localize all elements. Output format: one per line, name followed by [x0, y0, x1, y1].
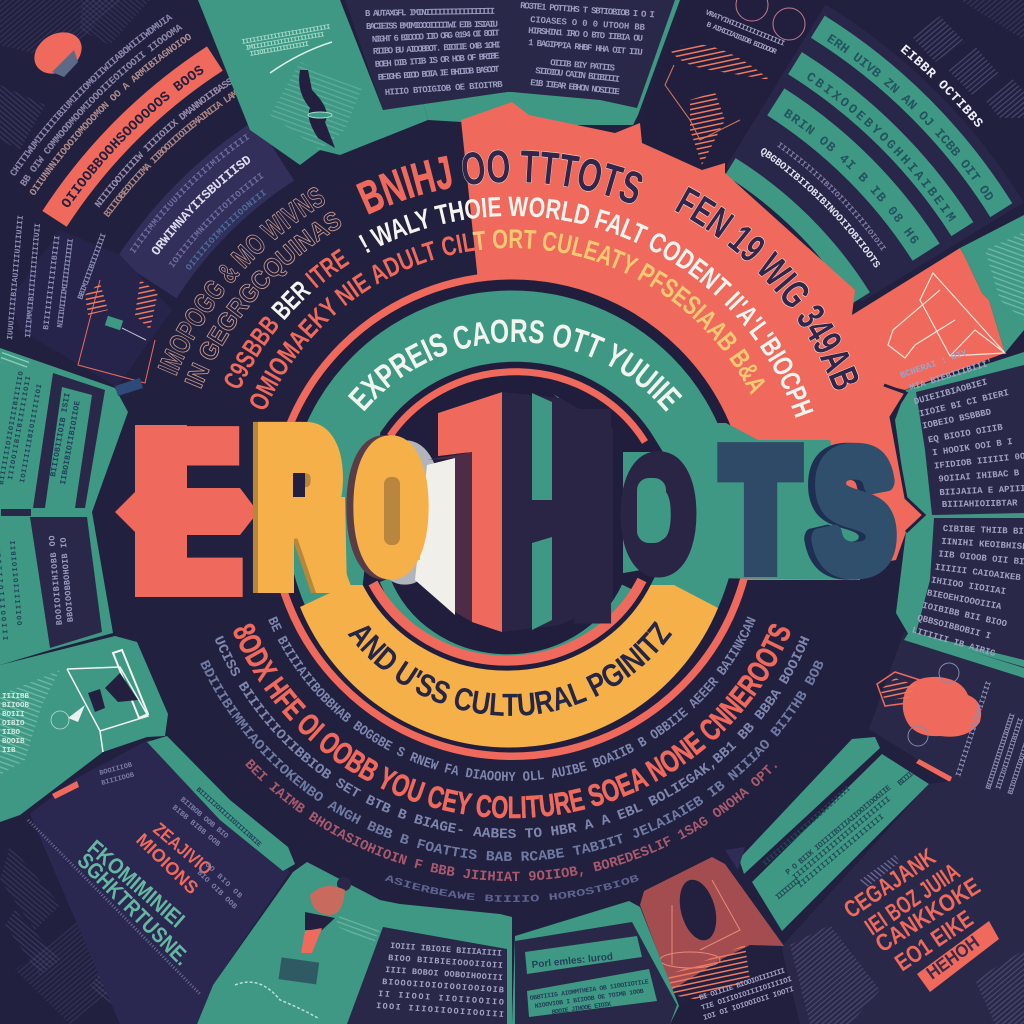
teal headline: SGHKTRTUSNE.	[72, 848, 195, 970]
slate row: IOIIIIIMNIIIIIOIIOIIIII	[168, 172, 264, 268]
text rows: E1B IIEAR EBHON NOSIIIE	[530, 78, 621, 97]
slate row: IIIIIMMIIIUUIIIIIIIIMIIIIIII	[130, 134, 250, 254]
text rows: HIIIO BTOIGIOB OE BIOITRB	[385, 80, 504, 98]
headline rows	[839, 843, 985, 977]
stripe 3	[776, 102, 926, 252]
small rows: IIIIIIIIIIIIIMMIIIIII	[955, 680, 994, 778]
lower teal frame	[730, 167, 861, 298]
panel: bottom text block under maroon: BI OIIIIE BIOOIOIIIIIII	[698, 967, 787, 1003]
hatch	[860, 855, 900, 888]
E arrow tips	[115, 492, 135, 532]
upper text rows: DUIEIIBIAOBIEI	[913, 377, 988, 407]
O fill behind counter	[365, 465, 420, 560]
text rows left column	[6, 215, 109, 340]
face outline	[665, 65, 740, 140]
panel: lower right coral headline	[782, 781, 1024, 1024]
lower panel grid rows	[47, 535, 76, 626]
stripe 1	[818, 27, 1001, 210]
text rows: BACIEISS BMIMIOOOIIIIIWI EIB ISIAIU	[366, 20, 498, 32]
icon: bottle hatch outline	[270, 62, 362, 150]
dark mini text	[279, 957, 319, 984]
tab 2 text: OBBTIIIG AIOMMTHEIA OB 1IOOIIOTILE	[529, 978, 649, 1002]
tab 2 text	[529, 978, 649, 1016]
lower text rows: QBBSOIBBOBII I	[916, 613, 992, 642]
upper dark frame	[33, 373, 105, 508]
line drawing	[235, 982, 318, 1018]
panel: left teal text panels	[0, 348, 143, 665]
panel: right lower brain art	[869, 632, 1024, 810]
rows above band: CHITIWUMIIIIIIBIUMIIIOMOIIWIIABOHIIIWDMUIA	[10, 14, 173, 176]
text rows: BEIGHS BIOD BOIA IE BHIIOB BASOOT	[378, 64, 501, 83]
white grid text: IIIIBB	[2, 693, 30, 701]
icon: coral cap	[27, 24, 89, 82]
panel: bottom text block under maroon: IOI OI IOIOOIOII IOOTI	[702, 986, 795, 1023]
teal headline: FKOMIMINIEI	[83, 835, 190, 933]
text rows: SIIOIOU CAIIN BIIBIIII	[535, 66, 620, 85]
white arc line	[270, 42, 332, 73]
text: world arc: ! WALY THOIE WORLD FALT CODENT II'A'L'BIOCPH	[358, 196, 814, 469]
headline rows: EO1 EIKE	[890, 905, 978, 977]
panel: right upper and lower text panels	[884, 348, 1024, 672]
text rows left column: IIIIMMIIBIIIIIIIIIIIIIUII	[24, 223, 43, 338]
dark text rows: IIII BOBOI OOBOIHOOIII	[385, 965, 503, 983]
lower text rows	[905, 524, 1024, 672]
text rows: OIIIB BIY PATIIS	[550, 58, 616, 74]
left rows: IOIIIIIIIBIOIIIIIIOI	[19, 384, 44, 484]
stripe text: BRIN OB 4I B IB 08 H6	[784, 108, 919, 244]
text rows left column: NIIIUIIIIMIIIIIIIIIIII	[56, 238, 76, 328]
lower text rows: IOIBIBB BII BIOO	[921, 601, 1008, 630]
dark text rows: IOIII IBIOIE BIIIAIIII	[390, 941, 502, 959]
text rows in panel: IIIOIIIIIIIIIIIIII	[249, 41, 310, 59]
letter O side: O	[349, 412, 419, 602]
panel: bottom teal runner	[197, 862, 512, 1024]
globe icons	[736, 0, 768, 21]
panel: teal hatch strip top-right edge	[960, 215, 1024, 353]
white grid text: OIBIO	[2, 720, 25, 728]
slate grid text: BIBB BIBB OOB	[170, 804, 222, 849]
letter S: S	[815, 420, 894, 604]
coral upper arc	[390, 372, 645, 442]
panel: bottom text block under maroon: TIE OIIIOIOIIIIOIIIIOI	[700, 976, 793, 1013]
text rows: CIOASES O 0 0 UTOOH BB	[530, 15, 646, 33]
panel: bottom text block under maroon	[680, 950, 800, 1024]
strip text: BIIIIIIOIIIIIOIIIIIBIIE	[194, 786, 263, 849]
text rows	[365, 1, 655, 98]
E stem	[135, 425, 187, 597]
text: EXPRESS arc: EXPREIS CAORS OTT YUUIIE	[348, 319, 682, 412]
letter E	[115, 384, 258, 638]
text: C988 arc: C9SBBB BER ITRE	[224, 248, 350, 388]
letter H: H	[498, 362, 615, 672]
teal sliver	[553, 394, 613, 438]
coral headline: MIOIONS	[132, 829, 202, 898]
coral tag	[52, 781, 79, 799]
text rows: RO3TE1 POTTIHS T SBTIOBIOB I O I	[520, 1, 655, 20]
dark tab	[725, 847, 745, 870]
dark text rows: II IIOOI IIOIIOOIIO	[378, 989, 504, 1008]
card text rows: P O BIIK IOIIIIBIIIAIIOOIIOOOIIE	[784, 784, 893, 877]
icon: coral brain	[903, 677, 981, 737]
coral band	[54, 58, 215, 219]
text rows left column: IUUUIIIIIBIIAUIIIIUIIIUIII	[6, 215, 26, 340]
coral headline: ZEAJIVIO	[149, 819, 216, 879]
card text rows: IIIIIIIIIIIIIIIIIIIIIIIIII	[791, 795, 893, 882]
H teal stripes	[532, 393, 552, 500]
dark separator	[1, 509, 31, 516]
text: slate bottom arc inner: BE BIIIIAIIBOBBHAB BOGGBE S RNEW FA DIAOOHY OLL AUIBE BOAIIB B OBBIIE AEEER BAIINKCAN	[268, 616, 756, 781]
upper text rows: IOBEIO BSBBBD	[921, 407, 993, 432]
inner rows: IIBOIBIOIIBIOIIOE	[59, 400, 83, 486]
letter O: O	[356, 412, 426, 602]
tab 2 text: BOOIE JIHOOE EIOIK	[551, 1001, 612, 1016]
coral lower arc	[373, 580, 642, 661]
left rows: OOIIIIIIOIIOIBII	[10, 540, 25, 625]
band label: OIIOOBBOOHSOOOOOOS BOOS	[62, 66, 204, 208]
panel: lower left dark card	[28, 736, 295, 1024]
text rows: HIRSHIN1 IRO O BTO IIBIA OU	[528, 26, 643, 44]
upper text rows: EQ BIOIO OIIIB	[927, 422, 1004, 446]
slate grid text: OO BIO OB	[203, 861, 243, 901]
teal top strip	[904, 632, 1024, 678]
text rows in panel	[241, 23, 331, 59]
text rows: B AUTAXGFL IMINIIIIIIIIIIIIIIIII	[365, 7, 495, 19]
dark notch line	[884, 385, 924, 532]
backing panel	[776, 85, 943, 252]
panel: top teal bottle panel	[198, 0, 428, 165]
letter R: R	[258, 391, 342, 623]
text: coral bottom arc: 8ODX HFE OI OOBB YOU CEY COLITURE SOEA NONE CNNEROOTS	[234, 624, 790, 818]
headline rows: IEI BOZ JUIIA	[860, 858, 965, 941]
icon: projector line art on coral	[888, 273, 1005, 358]
lower panel	[916, 518, 1024, 660]
white grid text: BOIII	[2, 711, 25, 719]
text: outlined arc upper: IMOPOGG & MO WIVNS	[157, 187, 325, 376]
maroon block	[428, 452, 472, 622]
card text rows: IIIIIIIIIIIIIIIIIIIIIIIII	[762, 785, 852, 868]
teal stripes	[335, 915, 380, 945]
row: OIIUNNNIIOOOIOMOOOMON OO A ARMIBIAGNOIOO	[30, 34, 191, 195]
dark text rows: BIOOOIIOIOIOOIOOIOIB	[382, 977, 504, 996]
lower panel grid rows: BOOIOIBIHIOBB OO	[47, 535, 65, 626]
white grid text: BOOIB	[2, 738, 25, 746]
headline rows: CEGAJANK	[839, 843, 941, 924]
inner rows: BIIIOBIIIOIB ISII	[49, 392, 73, 478]
slate row: OIIIIIOIMIIIIOONIII	[186, 189, 266, 270]
coral ring left arcs	[272, 276, 752, 756]
R stem and leg	[258, 425, 347, 593]
slate grid text: BIO OIB OOB	[195, 869, 238, 912]
slate tab	[115, 378, 143, 396]
upper text rows: 9OIIAI IHIBAC B	[938, 468, 1020, 485]
lower dark panel	[30, 517, 102, 648]
letter O dark: O	[623, 432, 694, 599]
slate row: IIIIIIIIIIIIBIIOIIIIIIIIIOIOII	[777, 142, 886, 251]
panel: bottom centre tabs	[512, 901, 679, 1024]
upper text rows: BCHERAI : OIY	[899, 348, 969, 381]
text rows in panel: IMIIIIIIIIIIIIIIIIIIIII	[245, 31, 325, 53]
icon: dark projector	[105, 673, 138, 702]
text rows: BOEH DIB ITIB IS OR HOB OF BRIBE	[375, 51, 500, 70]
teal backing behind T and S	[700, 423, 860, 580]
white grid text	[2, 693, 30, 755]
numeral 1 block	[438, 392, 502, 632]
panel: line art left	[10, 230, 172, 387]
top hatch	[0, 352, 30, 370]
text rows: RIIBO BU AIOOBBOT. BIOIIE O4B 1OHI	[373, 40, 501, 57]
panel: coral sector	[461, 102, 1005, 580]
row: BIIIOBEOIIIIMA IIBOOIIIOIIEMAINIIA LAME	[103, 90, 236, 218]
title letters T and S	[724, 419, 894, 604]
row: BB OIW COMMOODMOOMIOOOIIEOIIOOII IIOOOMA	[20, 24, 183, 186]
R side stem	[253, 425, 259, 593]
lower text rows: IHIIOO IIOIIAI	[930, 575, 1007, 597]
white grid text: BIIOOB	[2, 702, 30, 710]
card text rows: IIIIIIII	[774, 876, 803, 902]
R counter front	[293, 473, 305, 497]
icon: bottle	[299, 70, 335, 148]
upper text rows: MIA BIEBIIIBIII'	[909, 358, 994, 393]
coral strip	[916, 759, 952, 782]
white label: ORWIMNAYIISBUIIISD	[152, 156, 250, 254]
slate grid text: BIIIIOOB	[101, 771, 136, 788]
card text rows: IIIIIIIIIIIIIIIIIIIIII	[796, 813, 886, 890]
text: faint bottom arc: ASIERBEAWE BIIIIO HOROSTBIOB	[384, 875, 638, 902]
card text rows: BIIII	[896, 770, 916, 788]
teal strip	[147, 736, 295, 871]
text rows left column: BBIMIIIIBIIIIIIII	[76, 232, 109, 301]
icon: coral grid	[877, 672, 920, 706]
ship outline	[660, 880, 740, 968]
dark text rows	[376, 941, 504, 1020]
lower text rows: LITIIII IB AIRIG	[911, 625, 996, 659]
white block	[415, 458, 455, 615]
dark text rows: BIOO BIIBIEIOOOIIOII	[388, 953, 503, 971]
teal crescent	[385, 580, 627, 660]
slate grid text	[99, 761, 243, 912]
upper inner teal	[45, 387, 92, 508]
lower text rows: IIIIII CAIOAIKEB	[934, 562, 1022, 583]
rows below band: NIIIIOOIIIIIW IIIIOIIX DMANNOIIBASS	[94, 78, 232, 208]
O counter	[384, 477, 400, 545]
text rows: NIGHT 6 BIOOOO IIO ORG 0194 OI 8OIT	[372, 28, 501, 45]
text rows in panel: IIIIIIIIIIIIIIIIIIIIIIIII	[241, 23, 331, 47]
upper text rows: IFIDIOB IIIIII 0O	[934, 451, 1024, 472]
text: FEN 19 arc: FEN 19 WIG 349AB	[674, 186, 859, 390]
text: slate bottom arc 3: BDIIIBIMMIAOIIIOKENBO ANGH BBB B FOATTIS BAB RCABE TABIIT JELAIAIEB IB NIIIAO BIITHB BOB	[200, 660, 824, 861]
white row: QBGBOIIBIIOBIBINOOIIOBIIOOTS	[760, 148, 880, 268]
icon: outline circles	[939, 663, 959, 683]
left rows: IIIOOIIBIIBIIIIIIOII	[7, 376, 33, 481]
bottom yellow band	[300, 585, 718, 748]
round outline	[51, 711, 69, 729]
text rows: 1 BAGIPPIA RHBF HHA OIT IIU	[528, 38, 643, 58]
E glyph: E	[129, 384, 244, 638]
text: yellow band arc: AND U'SS CULTURAL PGINITZ	[348, 621, 672, 716]
panel: top centre text block	[345, 0, 680, 125]
shadow behind letter O: O	[370, 417, 440, 607]
curved border lines	[28, 820, 200, 994]
small rows	[955, 680, 1024, 796]
text: outlined arc lower: IN GEGRGCQUINAS	[184, 212, 342, 389]
stripe 2	[795, 63, 962, 229]
panel: bottom maroon art	[640, 847, 784, 1000]
text: adult culture arc: OMIOMAEKY NIE ADULT CILT ORT CULEATY PFSESIAAB B&A	[250, 230, 765, 410]
icon: runner	[301, 877, 351, 953]
tag text: HEHOH	[923, 932, 983, 983]
S shadow: S	[808, 420, 887, 604]
text rows left column: BIIIIIIIIIIIIIBIIII	[42, 235, 63, 330]
coral tag	[917, 921, 999, 992]
white frame	[67, 667, 148, 731]
panel: lighter text panel upper left	[119, 125, 294, 298]
panel: left lower teal diagram	[0, 636, 168, 822]
slate grid text: BOOIIIOB	[99, 761, 134, 778]
upper panel	[916, 365, 1024, 515]
panel: top right teal stripes	[726, 4, 1023, 302]
panel: inner teal disc	[286, 290, 738, 742]
text rows: B AIHIIIAIGIOB BIIOOOR	[705, 21, 778, 57]
lower text rows: BIEOEHIOOOIIIA	[926, 588, 1003, 612]
lower panel grid rows: BBOIOOBBOHOIB IO	[59, 537, 76, 623]
card text rows	[762, 770, 916, 902]
panel: bottom centre tabs: Porl emles: lurod	[531, 952, 614, 971]
coral ripple lines	[668, 945, 750, 1000]
panel: lower right teal card	[739, 737, 929, 931]
upper text rows: IIOIE BI CI BIERI	[918, 388, 1010, 419]
dark disc	[373, 372, 645, 661]
white grid text: IIB	[2, 747, 16, 755]
letter T: T	[724, 419, 797, 601]
upper text rows: I HOOIK OOI B I	[932, 437, 1013, 458]
tab 2 text: NIOOVIOB I BIIOOB OE TOIMB 1OOB	[534, 988, 644, 1010]
numeral 1 block: 1	[420, 334, 530, 702]
slate grid text: BIIBOB OOB BIO	[178, 796, 230, 841]
inner rows	[49, 392, 83, 486]
dark gap ring	[281, 285, 743, 747]
upper text rows: BIIJAIIA E APIII	[939, 484, 1024, 498]
hair stripes	[670, 44, 770, 80]
text rows: VRATYIHIIIIIIIIIIIIIII	[704, 9, 786, 49]
dark ellipse	[674, 876, 722, 944]
stripe text: ERH UIVB ZN AN OJ ICBB OIT OD	[827, 34, 993, 200]
text: slate bottom arc 2: UCISS BIIIIIIOIIBBIOB SET BTB B BIAGE- AABES TO HBR A A EBL BOLIEGAK,BB1 BB BBBA BOOIOH	[215, 636, 810, 838]
lower text rows: BIIIIIBIITTIIBB	[905, 637, 986, 672]
hatch	[0, 670, 60, 775]
panel: top-left text rows and coral band	[10, 14, 236, 227]
dark text rows: IOOI IIIOIIOOIIOOIII	[376, 1001, 504, 1020]
text: muted coral bottom arc: BEI IAIMB BHOIASIOHIOIN F BBB JIIHIAT 9OIIOB, BOREDESLIF 1SAG ONOHA OPT.	[245, 758, 778, 881]
text: BNIHJ headline arc: BNIHJ OO TTTOTS	[356, 150, 643, 214]
O dark counter	[637, 478, 666, 543]
panel: top right face art	[640, 0, 835, 170]
tab 2	[527, 969, 657, 1017]
stripe text: CBIXOOEBYOGHHIAIBEIM	[807, 72, 956, 222]
title: ERO1HOTS	[115, 334, 694, 702]
headline rows: CANKKOKE	[871, 873, 985, 958]
left rows	[0, 371, 44, 640]
center medallion	[373, 372, 645, 661]
letter R side: R	[253, 391, 337, 623]
white label: EIBBR OCTIBBS	[900, 44, 983, 127]
small rows: BIIIIIIIIIIIIIIIIIOIIIII	[985, 712, 1018, 791]
upper text rows	[899, 348, 1024, 510]
white grid text: IIBO	[2, 729, 21, 737]
tab 1	[525, 936, 642, 974]
